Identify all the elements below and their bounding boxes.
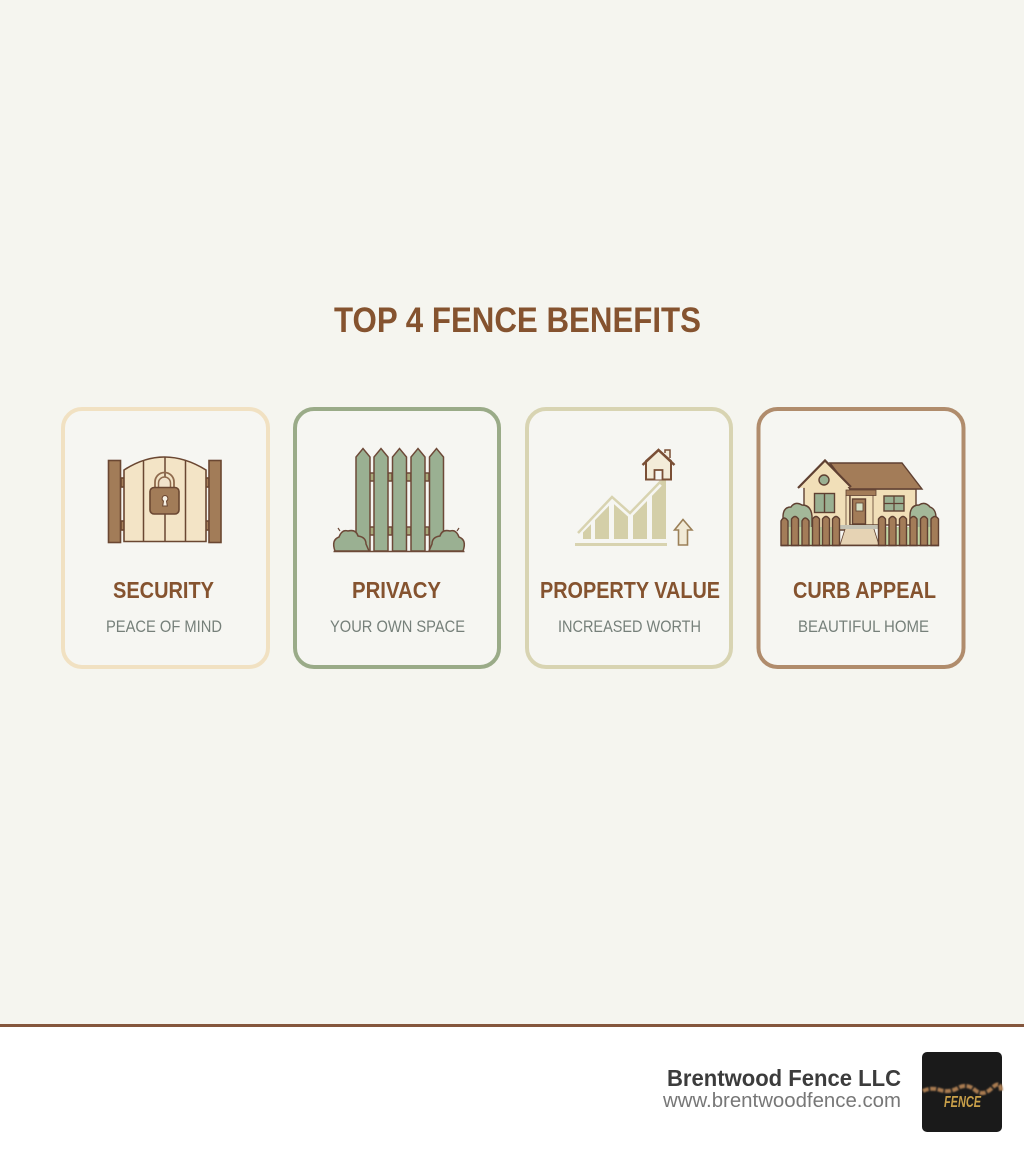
panel: property value [527, 409, 731, 667]
text: increased worth: INCREASED WORTH [558, 617, 701, 636]
icon: privacy fence with shrubs [334, 448, 464, 552]
panel: curb appeal [758, 409, 964, 667]
icon: rising value chart with house [575, 450, 692, 545]
text: peace of mind: PEACE OF MIND [106, 617, 222, 636]
logo [922, 1052, 1002, 1132]
heading: privacy: PRIVACY [352, 577, 441, 603]
company name: Brentwood Fence LLC [667, 1065, 901, 1091]
icon: house behind fence [781, 460, 939, 546]
icon: locked gate [108, 457, 221, 542]
panel: security [63, 409, 268, 667]
website: www.brentwoodfence.com [662, 1090, 901, 1112]
logo: FENCE [944, 1094, 982, 1111]
heading: property value: PROPERTY VALUE [540, 577, 720, 603]
heading: security: SECURITY [113, 577, 214, 603]
panel: privacy [295, 409, 499, 667]
text: beautiful home: BEAUTIFUL HOME [798, 617, 929, 636]
title: TOP 4 FENCE BENEFITS [334, 301, 701, 340]
text: your own space: YOUR OWN SPACE [330, 617, 465, 636]
footer [0, 1024, 1024, 1154]
heading: curb appeal: CURB APPEAL [793, 577, 936, 603]
